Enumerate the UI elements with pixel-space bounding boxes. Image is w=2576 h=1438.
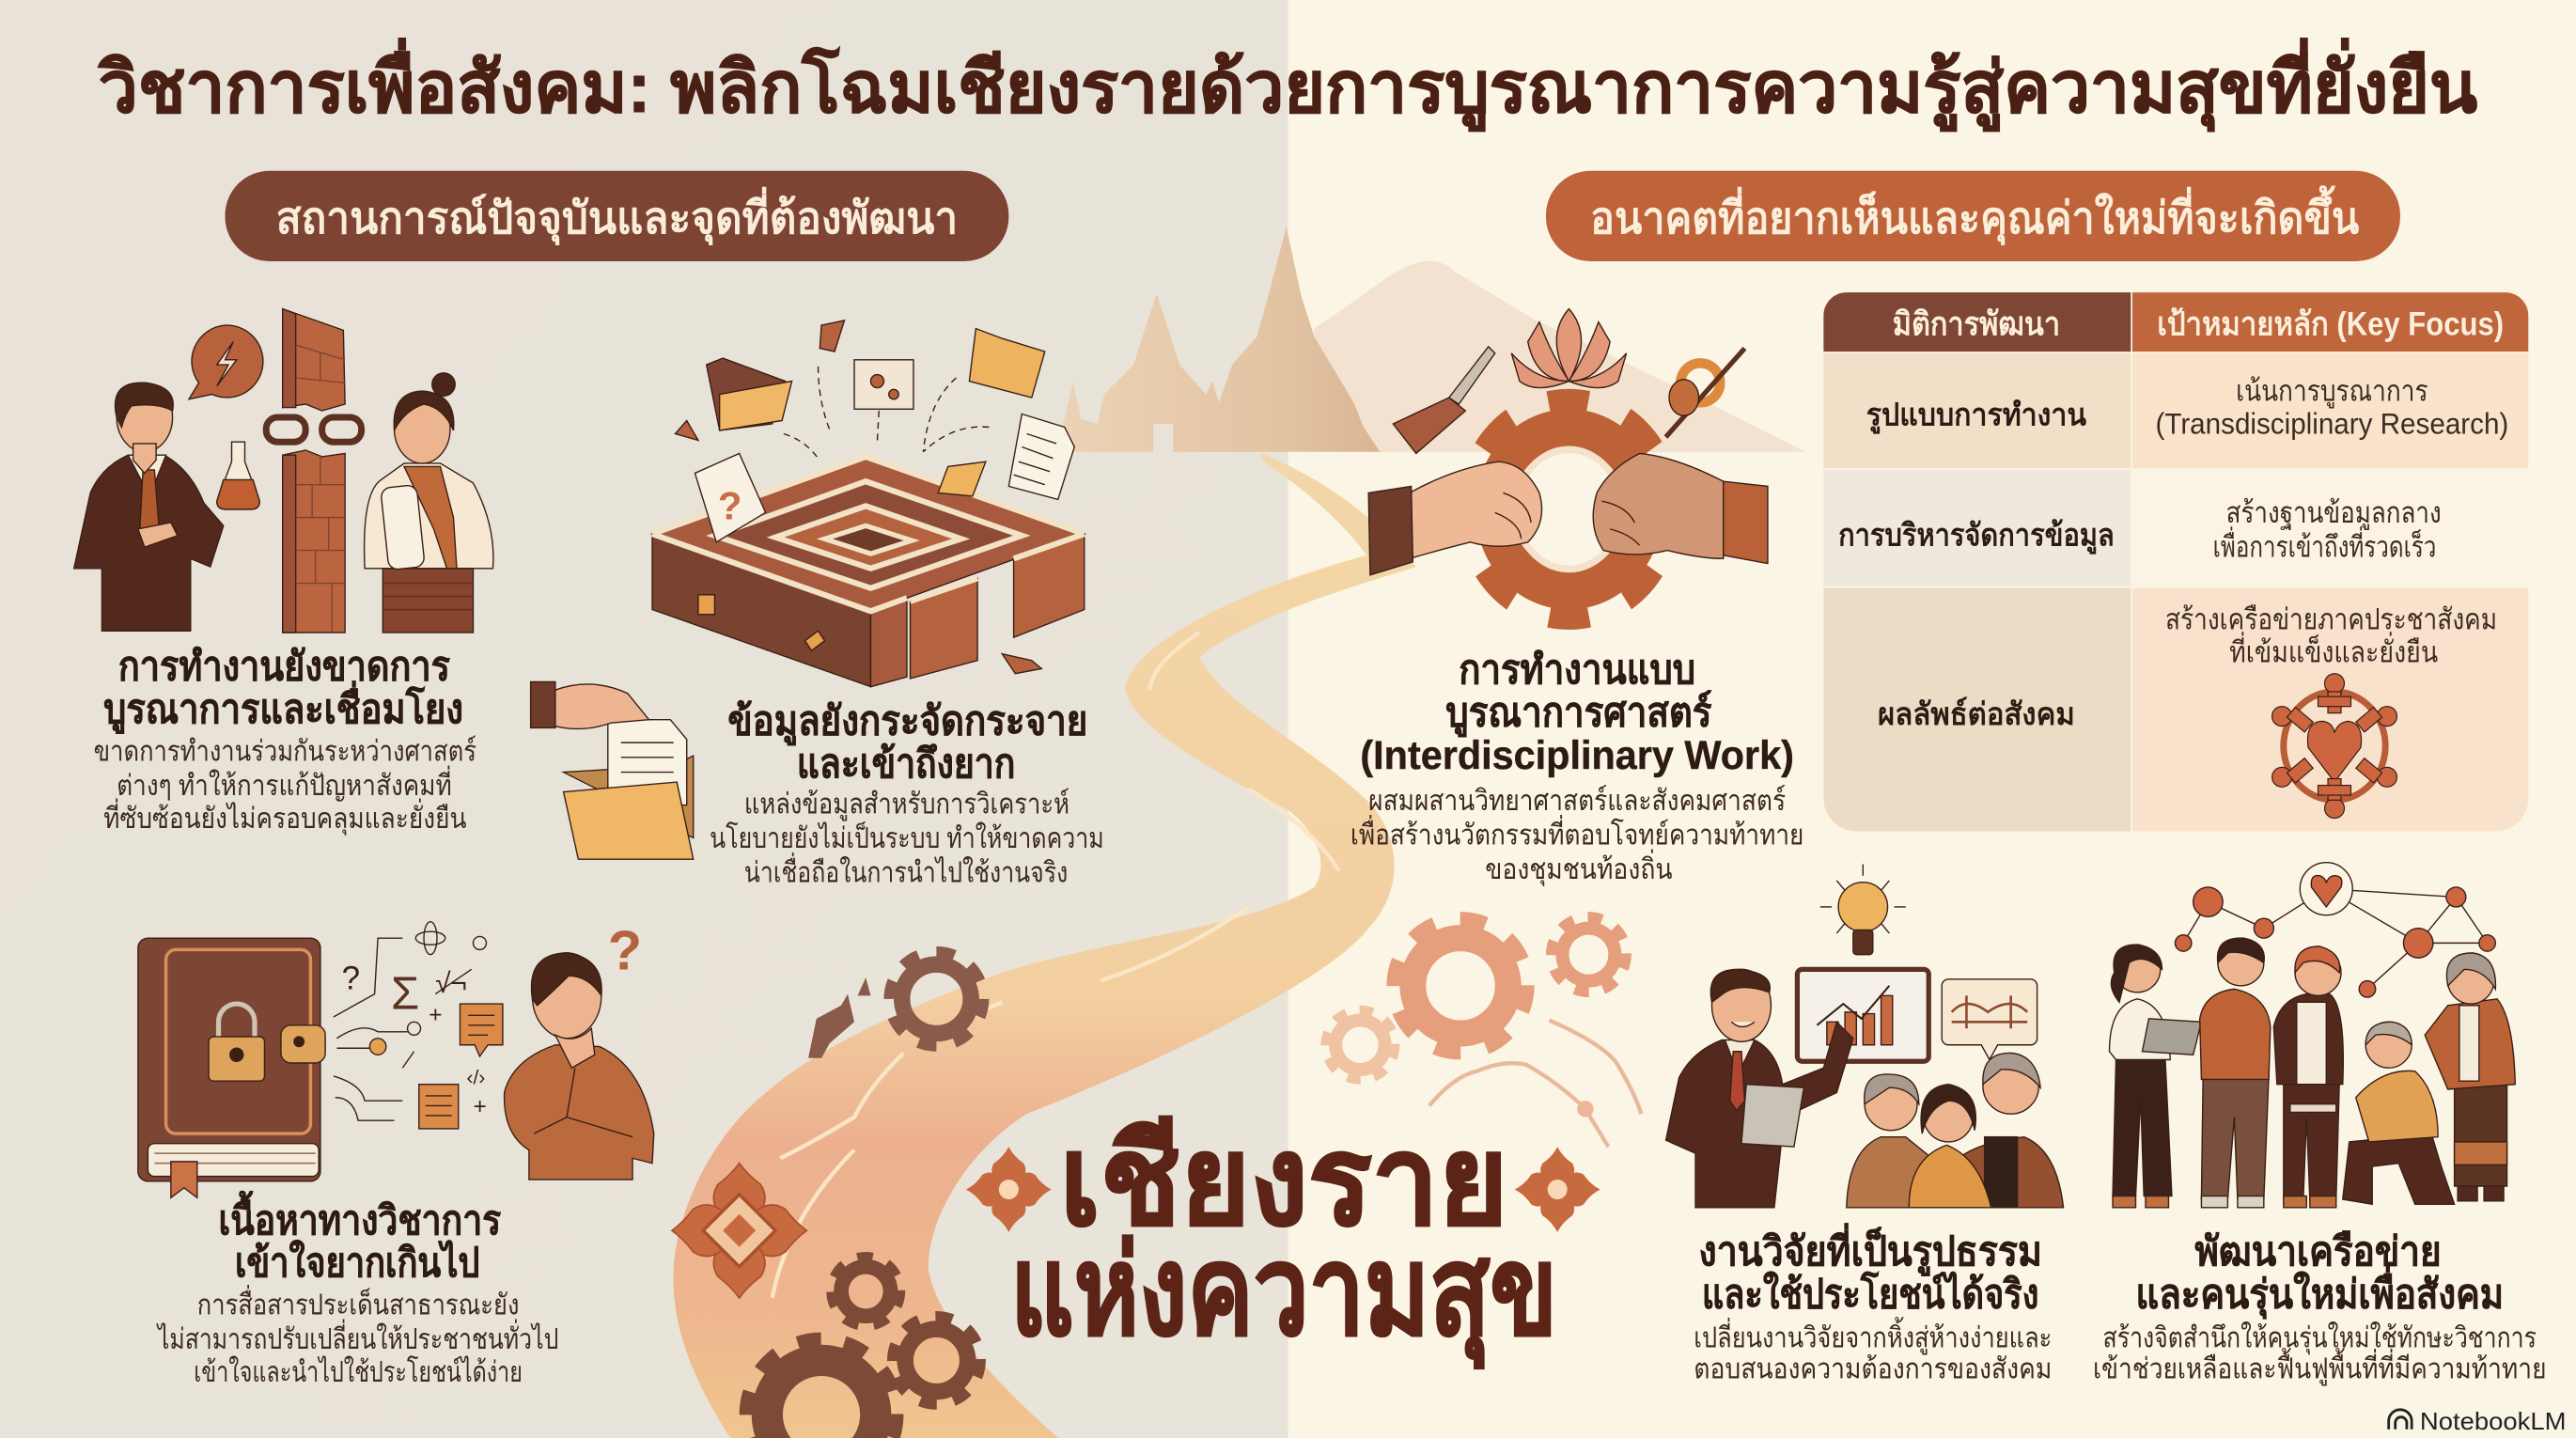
right hand: [1593, 453, 1768, 564]
flask: [217, 442, 259, 509]
body: เปลี่ยนงานวิจัยจากหิ้งสู่ห้างง่ายและ: [1694, 1316, 2052, 1354]
table row labels: การบริหารจัดการข้อมูล: [1838, 518, 2115, 555]
hand: [531, 681, 649, 728]
body: [155, 1284, 558, 1388]
heading: และเข้าถึงยาก: [797, 742, 1015, 787]
table key focus text: เพื่อการเข้าถึงที่รวดเร็ว: [2213, 526, 2436, 564]
document with stains: [854, 360, 913, 409]
person 2: man in orange: [2200, 938, 2271, 1208]
table row labels: รูปแบบการทำงาน: [1866, 399, 2086, 435]
road decoration: Lanna flower: [672, 1164, 806, 1298]
mountain silhouette: [1314, 261, 1805, 452]
heading: [103, 645, 463, 734]
heading: [1699, 1223, 2042, 1317]
folder back: [564, 756, 694, 838]
decorative curves and spark: [1429, 1021, 1641, 1147]
body: ตอบสนองความต้องการของสังคม: [1694, 1353, 2052, 1385]
heading: บูรณาการและเชื่อมโยง: [103, 680, 463, 734]
math symbols: Σ: [391, 968, 419, 1019]
heading: พัฒนาเครือข่าย: [2194, 1229, 2442, 1274]
chip: [1002, 654, 1041, 674]
man in suit: [74, 383, 224, 631]
math symbols: ?: [342, 960, 360, 996]
heading and text block 1: [94, 645, 476, 836]
person 1: woman with laptop: [2110, 945, 2201, 1208]
body: [1350, 785, 1803, 887]
folder front: [564, 782, 694, 859]
small gear and brush: [1666, 349, 1744, 437]
table header text: มิติการพัฒนา: [1893, 306, 2060, 343]
brick wall: [283, 309, 345, 633]
table key focus text: (Transdisciplinary Research): [2155, 407, 2508, 440]
orange folder: [969, 329, 1045, 398]
NotebookLM watermark: NotebookLM: [2420, 1407, 2566, 1435]
illustration: hands holding gear: [1368, 309, 1768, 635]
body: [710, 788, 1104, 889]
heading: และคนรุ่นใหม่เพื่อสังคม: [2135, 1265, 2504, 1319]
math symbols: +: [429, 1002, 443, 1027]
presenter: [1666, 969, 1853, 1208]
flower left: [966, 1147, 1052, 1232]
winding road: [673, 453, 1416, 1438]
paper sheet: [1008, 414, 1074, 499]
heading: บูรณาการศาสตร์: [1445, 690, 1711, 738]
table header text: เป้าหมายหลัก (Key Focus): [2157, 306, 2504, 343]
table key focus text: สร้างฐานข้อมูลกลาง: [2226, 496, 2442, 530]
body: แหล่งข้อมูลสำหรับการวิเคราะห์: [744, 788, 1069, 821]
scraper: [1393, 347, 1495, 453]
math symbols: +: [473, 1094, 487, 1119]
left section pill: สถานการณ์ปัจจุบันและจุดที่ต้องพัฒนา: [276, 186, 958, 245]
table key focus text: เน้นการบูรณาการ: [2236, 375, 2428, 409]
body: [1694, 1316, 2052, 1385]
body: ต่างๆ ทำให้การแก้ปัญหาสังคมที่: [117, 765, 452, 802]
right section pill: อนาคตที่อยากเห็นและคุณค่าใหม่ที่จะเกิดขึ้น: [1590, 185, 2359, 245]
heading: [219, 1190, 501, 1286]
body: [2093, 1321, 2547, 1386]
question mark: ?: [608, 918, 642, 981]
person 5: grandmother: [2425, 953, 2515, 1201]
heading: และใช้ประโยชน์ได้จริง: [1702, 1269, 2038, 1317]
heading and text block 4: [1694, 1223, 2052, 1385]
illustration: locked book and confused man: [138, 918, 654, 1197]
road decoration: gears lower: [747, 1257, 979, 1438]
heading: (Interdisciplinary Work): [1360, 733, 1794, 778]
icon: community circle with heart: [2272, 674, 2396, 819]
title line 1: เชียงราย: [1060, 1112, 1508, 1251]
table cells: [1823, 292, 2528, 832]
math symbols: ‹/›: [466, 1068, 485, 1089]
lock: [209, 1004, 325, 1081]
heading: [2135, 1229, 2504, 1319]
heading and text block 2: [710, 698, 1104, 889]
heading: [727, 698, 1087, 787]
heading and text block 5: [2093, 1229, 2547, 1386]
table row labels: ผลลัพธ์ต่อสังคม: [1878, 696, 2075, 732]
gear: [1451, 383, 1687, 635]
thinking man: [505, 953, 654, 1180]
body: [94, 735, 476, 836]
body: เพื่อสร้างนวัตกรรมที่ตอบโจทย์ความท้าทาย: [1350, 814, 1803, 851]
illustration: community network team: [2110, 863, 2515, 1208]
body: ของชุมชนท้องถิ่น: [1485, 849, 1673, 887]
table row labels: [1838, 399, 2115, 732]
heading: [1360, 648, 1794, 778]
lotus: [1511, 309, 1627, 388]
body: ที่ซับซ้อนยังไม่ครอบคลุมและยั่งยืน: [103, 798, 467, 836]
title: วิชาการเพื่อสังคม: พลิกโฉมเชียงรายด้วยการบูรณาการความรู้สู่ความสุขที่ยั่งยืน: [98, 38, 2477, 133]
broken chain: [266, 417, 362, 442]
flower right: [1515, 1147, 1600, 1232]
network graph: [2175, 863, 2495, 997]
illustration: large gears on the right: [1326, 917, 1626, 1079]
background right panel: [1288, 0, 2576, 1438]
question document: ?: [718, 483, 742, 527]
woman in traditional dress: [365, 373, 493, 633]
note icons: [419, 1004, 503, 1129]
note: [938, 461, 986, 496]
heading: ข้อมูลยังกระจัดกระจาย: [727, 698, 1087, 745]
left hand: [1368, 461, 1542, 575]
temple silhouette: [1056, 227, 1380, 452]
heading: การทำงานแบบ: [1459, 648, 1695, 693]
heading: เนื้อหาทางวิชาการ: [219, 1190, 501, 1243]
illustration: researcher presenting to community: [1666, 864, 2064, 1208]
heading and text block 3: [155, 1190, 558, 1388]
light bulb: [1820, 864, 1906, 955]
person 4: kneeling elder: [2290, 1022, 2455, 1204]
body: ขาดการทำงานร่วมกันระหว่างศาสตร์: [94, 735, 476, 767]
title line 2: แห่งความสุข: [1010, 1222, 1557, 1368]
heading: การทำงานยังขาดการ: [118, 645, 450, 690]
road decoration: gear upper: [890, 953, 982, 1045]
illustration: maze with scattered files: [652, 320, 1085, 687]
center title: [1010, 1112, 1557, 1368]
maze: [652, 457, 1085, 687]
illustration: hand placing paper in folder: [531, 681, 694, 859]
heading and text block: interdisciplinary: [1350, 648, 1803, 887]
open folder: [707, 358, 792, 430]
body: การสื่อสารประเด็นสาธารณะยัง: [197, 1284, 519, 1321]
right section pill: [1546, 171, 2400, 261]
table: [1823, 292, 2528, 832]
question document: [695, 453, 766, 542]
community members: [1847, 1053, 2064, 1208]
illustration: man and woman divided by a wall: [74, 309, 493, 633]
book: [138, 938, 320, 1197]
person 3: man with glasses: [2273, 946, 2343, 1208]
speech bubble: bridge: [1942, 979, 2037, 1059]
dashed flight paths: [784, 367, 989, 459]
paper: [608, 720, 687, 805]
table key focus text: ที่เข้มแข็งและยั่งยืน: [2229, 631, 2438, 668]
flying scrap: [820, 320, 845, 352]
body: ไม่สามารถปรับเปลี่ยนให้ประชาชนทั่วไป: [155, 1319, 558, 1355]
speech bubble: [189, 325, 263, 399]
body: นโยบายยังไม่เป็นระบบ ทำให้ขาดความ: [710, 821, 1104, 854]
math symbols: √¬: [435, 968, 467, 999]
body: เข้าใจและนำไปใช้ประโยชน์ได้ง่าย: [194, 1355, 523, 1388]
table header text: [1893, 306, 2504, 343]
body: น่าเชื่อถือในการนำไปใช้งานจริง: [744, 852, 1068, 889]
triangle scrap: [675, 421, 698, 440]
presentation board: [1797, 969, 1928, 1061]
body: ผสมผสานวิทยาศาสตร์และสังคมศาสตร์: [1368, 785, 1786, 817]
heading: งานวิจัยที่เป็นรูปธรรม: [1699, 1223, 2042, 1276]
table key focus text: สร้างเครือข่ายภาคประชาสังคม: [2165, 603, 2497, 636]
math symbols: [334, 922, 487, 1120]
table key focus text: [2155, 375, 2508, 668]
heading: เข้าใจยากเกินไป: [235, 1239, 479, 1286]
left section pill: [226, 171, 1008, 261]
background left panel: [0, 0, 1288, 1438]
